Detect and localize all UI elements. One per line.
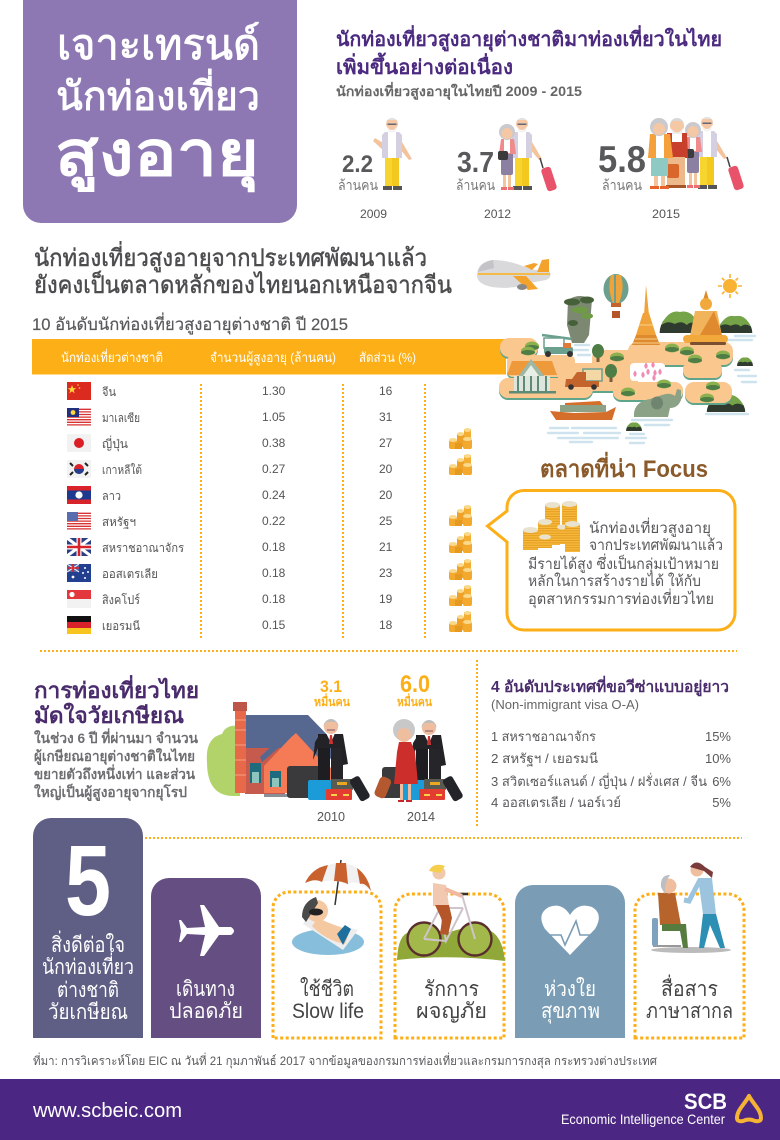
heading: focus market: ตลาดที่น่า Focus xyxy=(540,451,708,483)
icon: pagoda xyxy=(632,285,660,345)
organisation name: SCB xyxy=(684,1089,727,1114)
row: Germany: เยอรมนี xyxy=(102,619,140,633)
stat: 3.1: 3.1 xyxy=(320,677,342,696)
stat: 3.1 xyxy=(314,677,351,709)
row: Japan: 27 xyxy=(379,436,393,450)
title panel xyxy=(23,0,297,223)
table header: สัดส่วน (%) xyxy=(359,350,416,365)
card: slow life: Slow life xyxy=(292,1000,364,1023)
icon: group of four seniors xyxy=(648,117,744,191)
water lines xyxy=(548,336,756,443)
icon: coin stacks xyxy=(523,501,580,552)
stat: 6.0: หมื่นคน xyxy=(397,693,433,709)
row: Malaysia: 31 xyxy=(379,410,393,424)
stat 2009: ล้านคน xyxy=(338,177,378,193)
table header: จำนวนผู้สูงอายุ (ล้านคน) xyxy=(210,350,336,366)
row: UK xyxy=(67,532,472,556)
visa rows: 5% xyxy=(712,795,731,810)
heading: retirees: การท่องเที่ยวไทย xyxy=(34,674,199,703)
panel: five things: นักท่องเที่ยว xyxy=(42,952,134,979)
row: China: 1.30 xyxy=(262,384,286,398)
illustration: house and retiree 2010 xyxy=(207,702,371,802)
row: Singapore: 0.18 xyxy=(262,592,286,606)
text block: retirees description: ใหญ่เป็นผู้สูงอายุจากยุโรป xyxy=(34,783,187,801)
row: Singapore: สิงคโปร์ xyxy=(102,593,141,607)
stat 2015: 5.8 xyxy=(598,139,646,180)
stat 2012 xyxy=(456,118,557,221)
visa rows: 1 สหราชอาณาจักร xyxy=(491,729,596,744)
card: language: สื่อสาร xyxy=(661,974,718,1001)
text block: retirees description: ในช่วง 6 ปี ที่ผ่านมา จำนวน xyxy=(34,728,198,746)
illustration: retired couple 2014 xyxy=(373,719,464,802)
row: USA xyxy=(67,505,472,530)
panel: five things: สิ่งดีต่อใจ xyxy=(51,930,125,957)
row: South Korea: 20 xyxy=(379,462,393,476)
row: Germany: 0.15 xyxy=(262,618,286,632)
row: South Korea xyxy=(67,454,472,478)
card: safe travel: เดินทาง xyxy=(176,978,235,1001)
icon: airplane xyxy=(477,259,550,290)
card: health: สุขภาพ xyxy=(541,1000,600,1024)
card: safe travel: ปลอดภัย xyxy=(169,1000,243,1023)
stat: 6.0 xyxy=(397,671,433,709)
icon: tuk tuk xyxy=(542,335,573,357)
row: Malaysia xyxy=(67,408,393,426)
hills xyxy=(660,312,700,333)
stat 2012: 3.7 xyxy=(457,147,494,179)
card: adventure xyxy=(395,865,505,1038)
row: Australia: 23 xyxy=(379,566,393,580)
row: Germany: 18 xyxy=(379,618,393,632)
title line 2: นักท่องเที่ยว xyxy=(56,69,260,119)
stat: 3.1: หมื่นคน xyxy=(314,693,351,709)
callout: focus market note: มีรายได้สูง ซึ่งเป็นกลุ่มเป้าหมาย xyxy=(528,553,719,574)
icon: heart xyxy=(541,906,599,955)
row: China: จีน xyxy=(102,385,116,399)
callout: focus market note: นักท่องเที่ยวสูงอายุ xyxy=(589,517,711,538)
row: Japan: ญี่ปุ่น xyxy=(102,435,128,452)
visa rows: 6% xyxy=(712,774,731,789)
row: Laos: 20 xyxy=(379,488,393,502)
row: Australia xyxy=(67,559,472,582)
heading: growth of senior tourists xyxy=(336,24,722,79)
callout: focus market note: หลักในการสร้างรายได้ ให้กับ xyxy=(528,572,701,590)
icon: one senior man xyxy=(373,118,412,190)
row: USA: 25 xyxy=(379,514,393,528)
row: Laos: 0.24 xyxy=(262,488,286,502)
row: Australia: 0.18 xyxy=(262,566,286,580)
panel: five things xyxy=(33,818,143,1038)
icon: balloon xyxy=(604,274,628,318)
row: Malaysia: 1.05 xyxy=(262,410,286,424)
icon: limestone rock xyxy=(564,296,594,343)
panel: five things: วัยเกษียณ xyxy=(48,1001,128,1024)
table rows xyxy=(67,382,472,634)
row: South Korea: 0.27 xyxy=(262,462,286,476)
visa heading: 4 อันดับประเทศที่ขอวีซ่าแบบอยู่ยาว xyxy=(491,675,729,698)
stat 2015: ล้านคน xyxy=(602,177,642,193)
text block: retirees description: ขยายตัวถึงหนึ่งเท่า และส่วน xyxy=(34,764,195,782)
heading: retirees: มัดใจวัยเกษียณ xyxy=(34,702,184,728)
icon: elephant xyxy=(634,389,681,417)
stat 2012: 2012 xyxy=(484,207,511,221)
row: Germany xyxy=(67,611,472,634)
heading: growth of senior tourists: เพิ่มขึ้นอย่างต่อเนื่อง xyxy=(336,52,513,79)
icon: sun xyxy=(718,274,742,298)
visa rows xyxy=(491,729,731,810)
row: Japan xyxy=(67,428,472,452)
visa rows: 4 ออสเตรเลีย / นอร์เวย์ xyxy=(491,795,621,810)
section heading: developed markets: นักท่องเที่ยวสูงอายุจากประเทศพัฒนาแล้ว xyxy=(34,241,427,273)
footer xyxy=(0,1079,780,1140)
card: slow life: ใช้ชีวิต xyxy=(300,977,354,1001)
visa subheading: (Non-immigrant visa O-A) xyxy=(491,697,639,712)
stat 2009 xyxy=(338,118,412,221)
footer: Economic Intelligence Center xyxy=(561,1111,725,1127)
icon: senior couple xyxy=(498,118,557,192)
land blocks xyxy=(499,338,733,405)
row: Malaysia: มาเลเซีย xyxy=(102,411,140,425)
stat 2012: ล้านคน xyxy=(456,177,495,193)
visa rows: 2 สหรัฐฯ / เยอรมนี xyxy=(491,751,598,767)
card: language: ภาษาสากล xyxy=(646,1000,733,1023)
stat 2015 xyxy=(598,117,744,221)
stat 2015: 2015 xyxy=(652,207,680,221)
visa rows: 10% xyxy=(705,751,731,766)
card: adventure: รักการ xyxy=(424,978,479,1001)
visa list xyxy=(491,675,731,810)
website: www.scbeic.com xyxy=(32,1100,182,1122)
card: adventure: ผจญภัย xyxy=(416,1000,487,1023)
row: Japan: 0.38 xyxy=(262,436,286,450)
icon: nurse and senior xyxy=(651,862,731,953)
row: UK: 21 xyxy=(379,540,393,554)
card: health: ห่วงใย xyxy=(544,977,596,1001)
row: USA: 0.22 xyxy=(262,514,286,528)
section heading: developed markets xyxy=(34,241,452,299)
callout: focus market note: จากประเทศพัฒนาแล้ว xyxy=(589,537,723,554)
table title: 10 อันดับนักท่องเที่ยวสูงอายุต่างชาติ ปี 2015 xyxy=(32,312,348,335)
title line 3: สูงอายุ xyxy=(55,120,259,192)
section heading: developed markets: ยังคงเป็นตลาดหลักของไทยนอกเหนือจากจีน xyxy=(34,270,452,299)
year labels: 2010 xyxy=(317,809,345,824)
row: Singapore: 19 xyxy=(379,592,393,606)
row: USA: สหรัฐฯ xyxy=(102,515,136,529)
source note: ที่มา: การวิเคราะห์โดย EIC ณ วันที่ 21 กุมภาพันธ์ 2017 จากข้อมูลของกรมการท่องเที่ยวและกรมการกงสุล กระทรวงต่างประเทศ xyxy=(33,1052,657,1069)
big number five: 5 xyxy=(65,825,111,937)
row: UK: 0.18 xyxy=(262,540,286,554)
stat 2009: 2.2 xyxy=(342,151,373,178)
card: language xyxy=(635,862,744,1038)
icon: SCB bell logo xyxy=(737,1096,761,1121)
illustration: map of Thailand attractions xyxy=(477,259,756,443)
title line 1: เจาะเทรนด์ xyxy=(57,21,260,68)
row: China xyxy=(67,382,393,400)
year labels: 2014 xyxy=(407,809,435,824)
text block: retirees description: ผู้เกษียณอายุต่างชาติในไทย xyxy=(34,747,195,765)
row: Singapore xyxy=(67,585,472,608)
card: slow life xyxy=(273,860,381,1038)
table header: นักท่องเที่ยวต่างชาติ xyxy=(61,349,163,365)
visa rows: 15% xyxy=(705,729,731,744)
row: China: 16 xyxy=(379,384,393,398)
row: South Korea: เกาหลีใต้ xyxy=(102,463,142,477)
panel: five things: ต่างชาติ xyxy=(57,979,119,1002)
subheading: นักท่องเที่ยวสูงอายุในไทยปี 2009 - 2015 xyxy=(336,81,583,100)
heading: retirees xyxy=(34,674,199,728)
stat 2009: 2009 xyxy=(360,207,387,221)
stat: 6.0: 6.0 xyxy=(400,671,430,698)
visa rows: 3 สวิตเซอร์แลนด์ / ญี่ปุ่น / ฝรั่งเศส / จีน xyxy=(491,773,707,790)
text block: retirees description xyxy=(34,728,198,801)
icon: temple xyxy=(507,359,557,394)
heading: growth of senior tourists: นักท่องเที่ยวสูงอายุต่างชาติมาท่องเที่ยวในไทย xyxy=(336,24,722,53)
row: Laos: ลาว xyxy=(102,489,121,503)
callout: focus market note: อุตสาหกรรมการท่องเที่ยวไทย xyxy=(528,588,714,609)
icon: plane xyxy=(179,905,234,956)
icon: pickup truck xyxy=(565,369,602,390)
card: safe travel xyxy=(151,878,261,1038)
callout: focus market note xyxy=(488,490,735,630)
icon: senior on bicycle xyxy=(397,865,505,961)
icon: long-tail boat xyxy=(550,401,616,420)
icon: man relaxing under umbrella xyxy=(292,860,371,955)
year labels xyxy=(317,809,435,824)
table header xyxy=(32,339,506,374)
row: Australia: ออสเตรเลีย xyxy=(102,567,158,581)
icon: Buddha statue xyxy=(683,290,728,345)
row: Laos xyxy=(67,486,393,504)
row: UK: สหราชอาณาจักร xyxy=(102,541,185,555)
card: health xyxy=(515,885,625,1038)
